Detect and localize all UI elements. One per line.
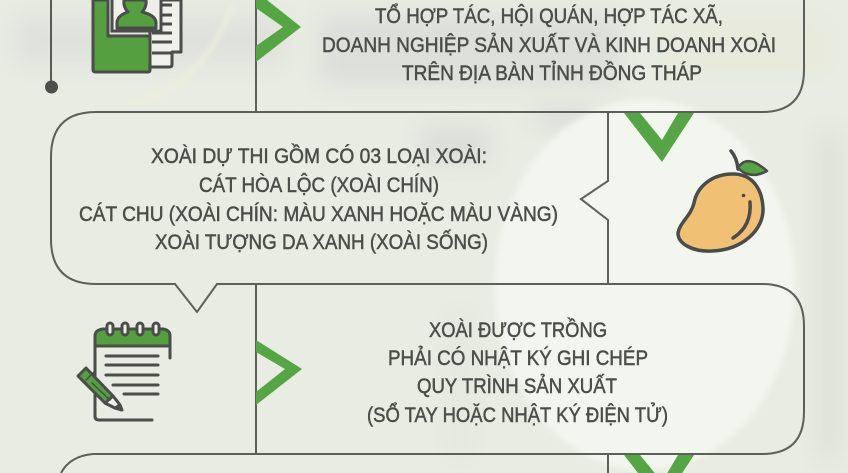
arrow: chevron top right (256, 0, 301, 62)
text: eligible participants: TỔ HỢP TÁC, HỘI QUÁN, HỢP TÁC XÃ, (375, 3, 723, 28)
text: production diary: PHẢI CÓ NHẬT KÝ GHI CHÉP (388, 345, 648, 370)
text: mango varieties (79, 143, 558, 254)
text: eligible participants: DOANH NGHIỆP SẢN XUẤT VÀ KINH DOANH XOÀI (322, 32, 776, 57)
text: eligible participants (322, 3, 776, 85)
text: production diary: (SỔ TAY HOẶC NHẬT KÝ ĐIỆN TỬ) (367, 402, 668, 427)
text: eligible participants: TRÊN ĐỊA BÀN TỈNH ĐỒNG THÁP (402, 60, 702, 85)
text: production diary: XOÀI ĐƯỢC TRỒNG (429, 317, 607, 342)
text: mango varieties: CÁT CHU (XOÀI CHÍN: MÀU XANH HOẶC MÀU VÀNG) (79, 201, 558, 226)
icon: mango (678, 151, 767, 251)
text: production diary (367, 317, 668, 427)
text: mango varieties: CÁT HÒA LỘC (XOÀI CHÍN) (199, 172, 439, 197)
arrow: chevron down to panel 2 (624, 113, 694, 162)
arrow: chevron right panel 3 (256, 340, 302, 405)
text: mango varieties: XOÀI DỰ THI GỒM CÓ 03 LOẠI XOÀI: (151, 143, 487, 168)
connector line with dot (45, 0, 58, 94)
icon: profile document (93, 0, 181, 72)
text: production diary: QUY TRÌNH SẢN XUẤT (417, 373, 617, 398)
text: mango varieties: XOÀI TƯỢNG DA XANH (XOÀI SỐNG) (155, 228, 488, 254)
icon: notebook with pencil (78, 323, 170, 420)
arrow: chevron down bottom (624, 455, 694, 473)
